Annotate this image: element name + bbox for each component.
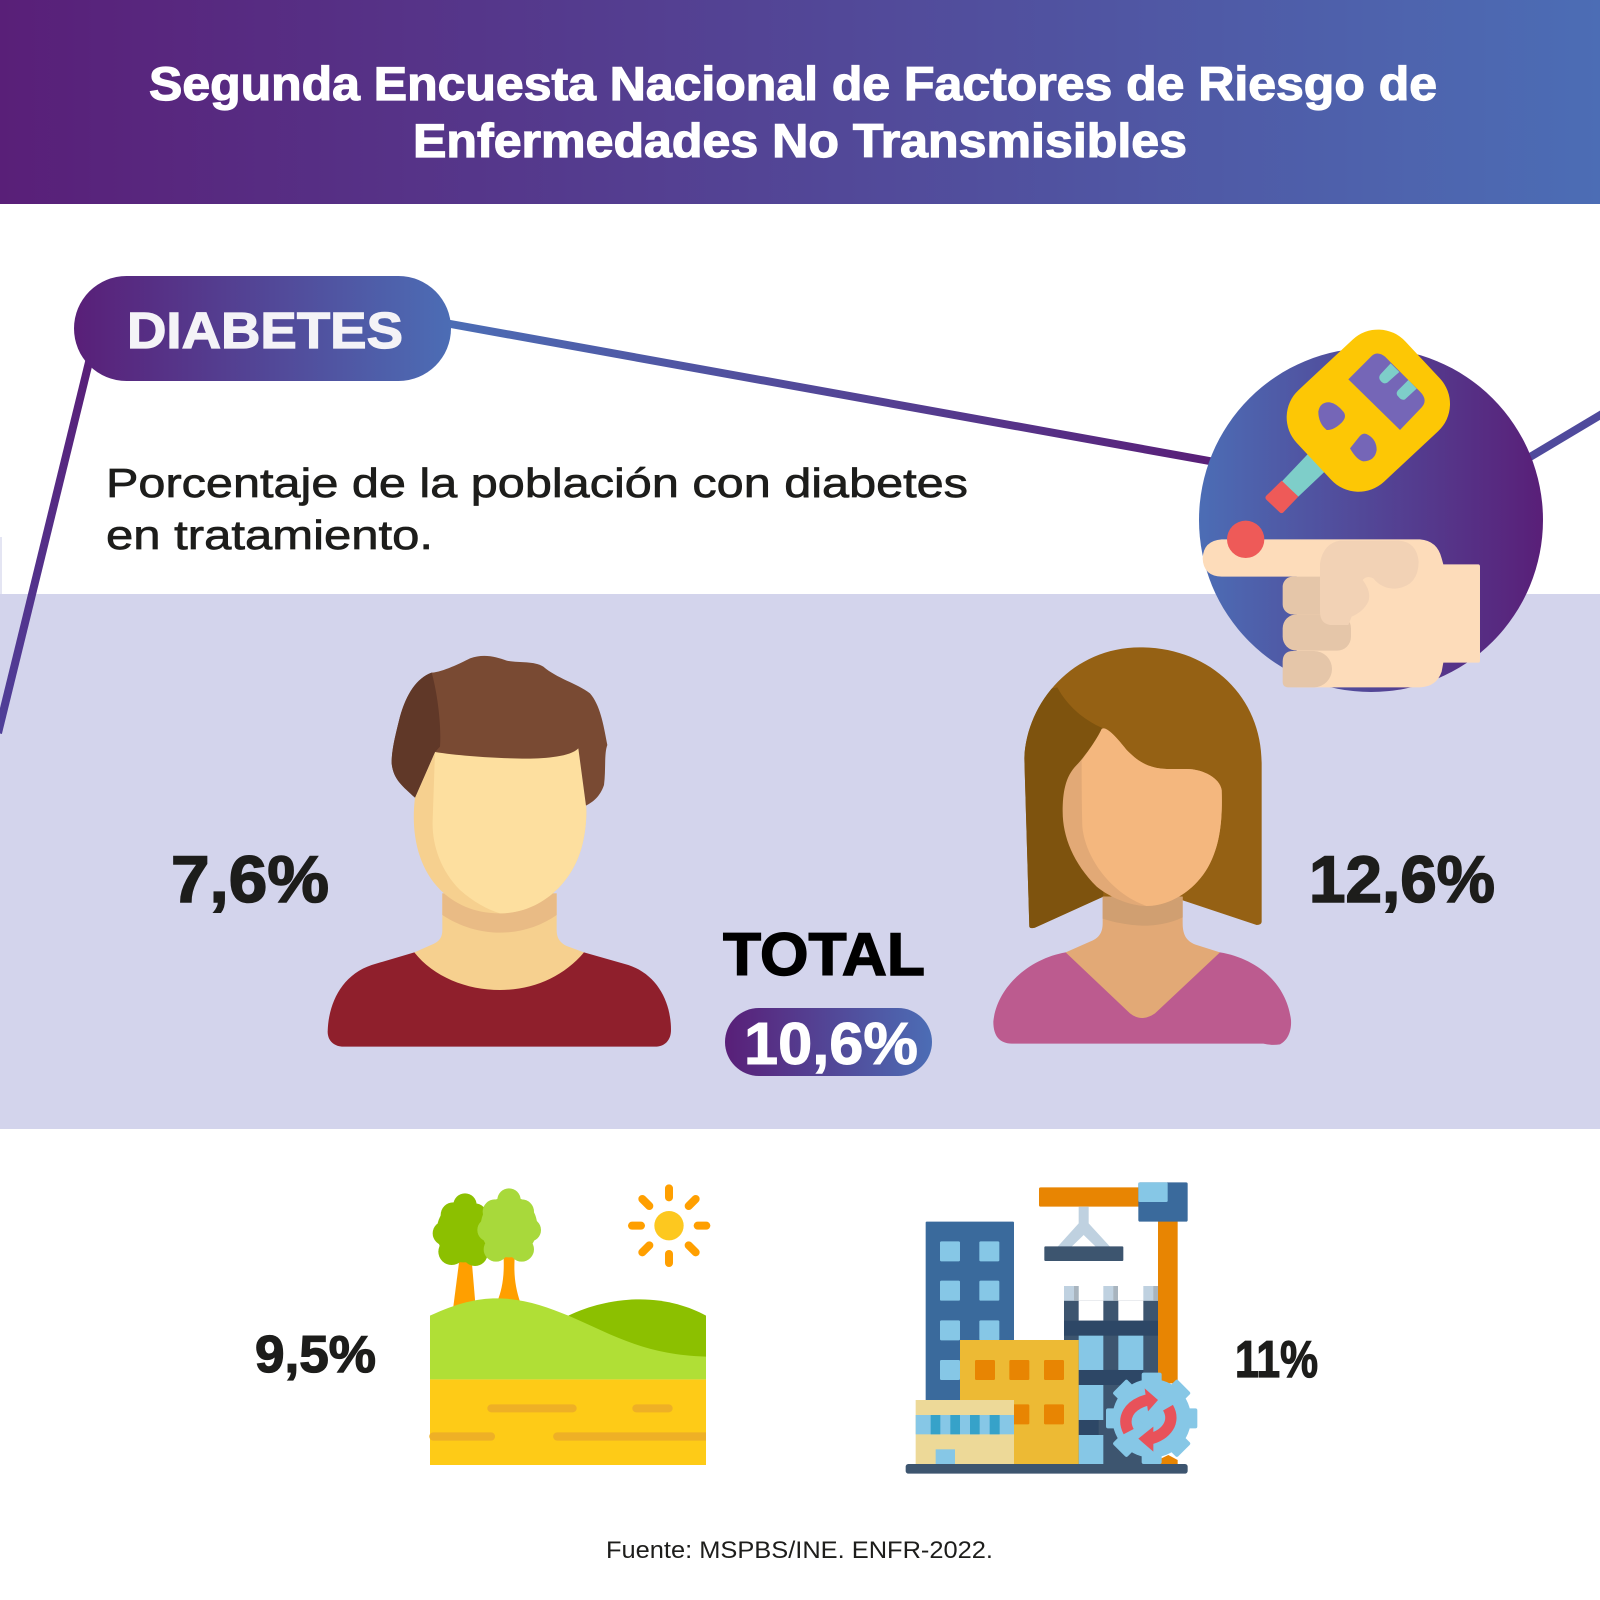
connector line: pill to circle	[445, 323, 1215, 462]
source note: Fuente: MSPBS/INE. ENFR-2022.	[606, 1537, 993, 1564]
lavender band	[0, 594, 1600, 1129]
icon: gear with arrows	[1106, 1373, 1197, 1464]
value: women 12,6%: 12,6%	[1309, 842, 1495, 916]
connector line: circle to right edge	[1525, 414, 1600, 460]
description text	[106, 460, 968, 558]
value: men 7,6%: 7,6%	[171, 842, 329, 916]
DIABETES pill: DIABETES	[127, 302, 403, 359]
title: Segunda Encuesta Nacional de Factores de Riesgo de	[149, 57, 1437, 110]
glucometer screen	[1348, 353, 1425, 430]
description text: Porcentaje de la población con diabetes	[106, 460, 968, 506]
value: rural 9,5%: 9,5%	[255, 1326, 376, 1384]
test strip	[1265, 450, 1330, 513]
icon: glucometer and hand in circle	[1199, 314, 1543, 692]
value: urban 11%: 11%	[1235, 1331, 1318, 1389]
label: TOTAL: TOTAL	[723, 921, 925, 988]
glucometer body	[1271, 314, 1465, 507]
glucometer buttons	[1318, 402, 1377, 461]
description text: en tratamiento.	[106, 512, 433, 558]
title	[149, 57, 1437, 167]
DIABETES pill	[74, 276, 451, 381]
icon: woman	[993, 647, 1291, 1045]
title: Enfermedades No Transmisibles	[413, 114, 1187, 167]
hand	[1203, 521, 1480, 687]
icon: rural landscape	[429, 1188, 706, 1465]
icon: urban buildings and crane	[906, 1182, 1197, 1474]
header banner	[0, 0, 1600, 204]
icon: man	[328, 656, 671, 1047]
connector line: pill to left edge	[0, 358, 90, 733]
icon: sun	[632, 1188, 706, 1263]
total pill 10,6%: 10,6%	[744, 1011, 918, 1077]
